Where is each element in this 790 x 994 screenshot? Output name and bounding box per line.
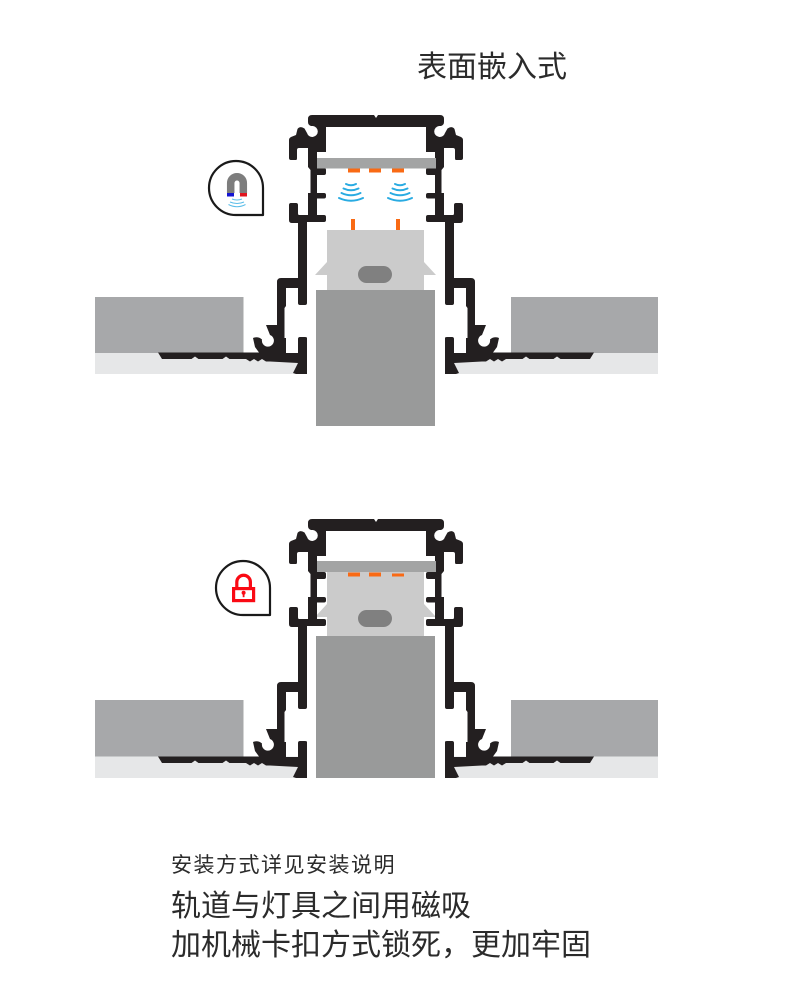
icon: lock badge	[216, 561, 270, 615]
track rail profile	[158, 519, 594, 778]
left ceiling panel	[95, 297, 307, 374]
orange magnetic contacts	[348, 168, 404, 230]
light fixture head	[315, 572, 436, 636]
diagram: magnetic attachment	[95, 115, 658, 426]
magnet strip	[317, 158, 436, 168]
description line 1: 轨道与灯具之间用磁吸	[171, 890, 471, 923]
magnet strip	[317, 561, 436, 572]
orange magnetic contacts	[348, 572, 404, 576]
left ceiling panel	[95, 700, 307, 778]
right ceiling panel	[445, 297, 658, 374]
light fixture body	[316, 636, 435, 778]
note: installation reference: 安装方式详见安装说明	[171, 854, 396, 877]
light fixture body	[316, 290, 435, 426]
track rail profile	[158, 115, 594, 374]
light fixture head	[315, 230, 436, 290]
left magnetic waves	[339, 184, 363, 201]
title: 表面嵌入式	[417, 51, 567, 84]
right magnetic waves	[388, 184, 412, 201]
description line 2: 加机械卡扣方式锁死，更加牢固	[171, 929, 591, 962]
diagram: mechanical lock	[95, 519, 658, 778]
right ceiling panel	[445, 700, 658, 778]
icon: magnet badge	[209, 161, 263, 215]
